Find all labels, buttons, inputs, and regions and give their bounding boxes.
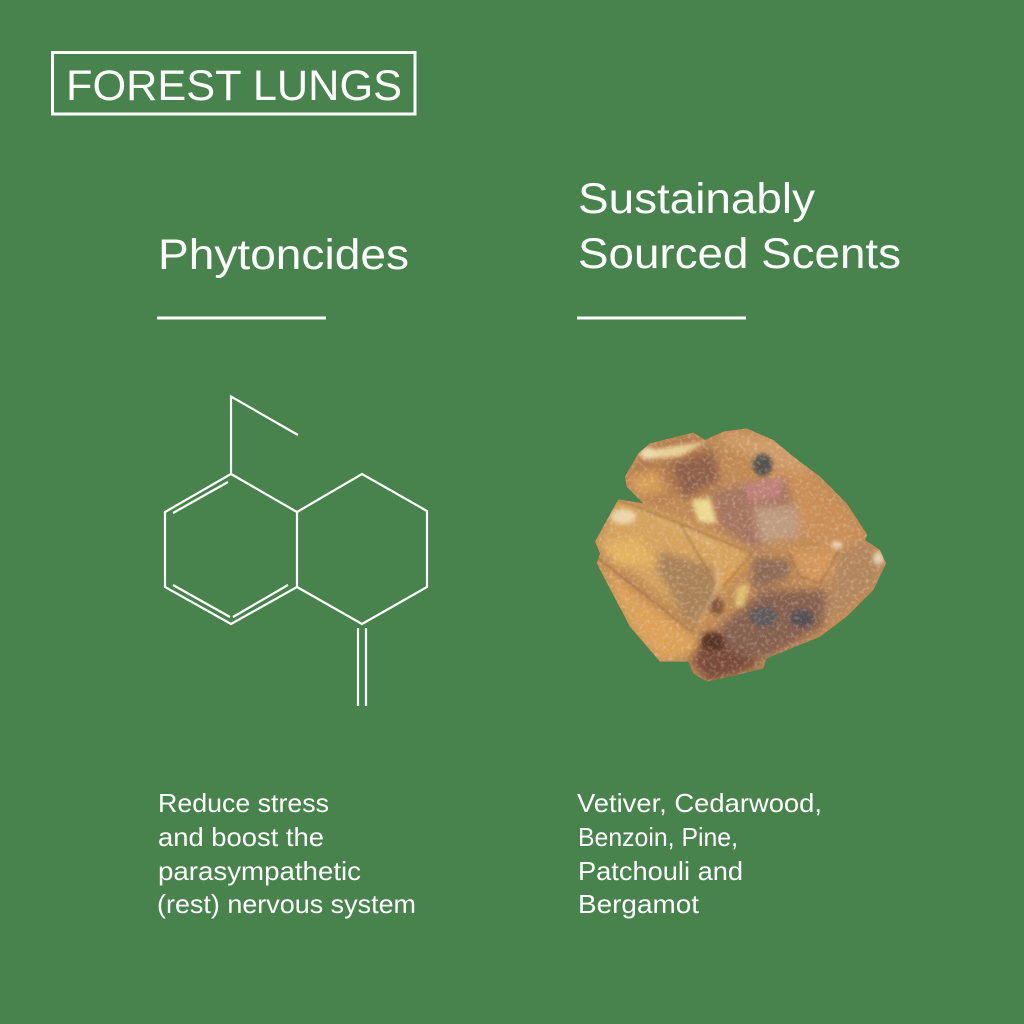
- icon: phytoncide molecule: [165, 396, 427, 706]
- body text: phytoncides benefits: (rest) nervous system: [157, 889, 416, 919]
- body text: scent list: Bergamot: [578, 889, 700, 919]
- body text: scent list: Benzoin, Pine,: [578, 822, 738, 852]
- image: resin rock: [595, 428, 886, 682]
- body text: scent list: Vetiver, Cedarwood,: [577, 788, 822, 818]
- heading: Sustainably Sourced Scents: Sustainably: [578, 175, 816, 223]
- body text: phytoncides benefits: parasympathetic: [158, 856, 361, 886]
- title box: FOREST LUNGS: [66, 62, 402, 110]
- body text: phytoncides benefits: and boost the: [158, 822, 324, 852]
- heading: Sustainably Sourced Scents: Sourced Scents: [578, 230, 901, 278]
- crystal edges: [598, 500, 838, 632]
- heading underline right: [577, 316, 746, 320]
- heading underline left: [157, 316, 326, 320]
- heading: Phytoncides: Phytoncides: [158, 231, 409, 279]
- body text: scent list: Patchouli and: [578, 856, 743, 886]
- body text: phytoncides benefits: Reduce stress: [158, 788, 329, 818]
